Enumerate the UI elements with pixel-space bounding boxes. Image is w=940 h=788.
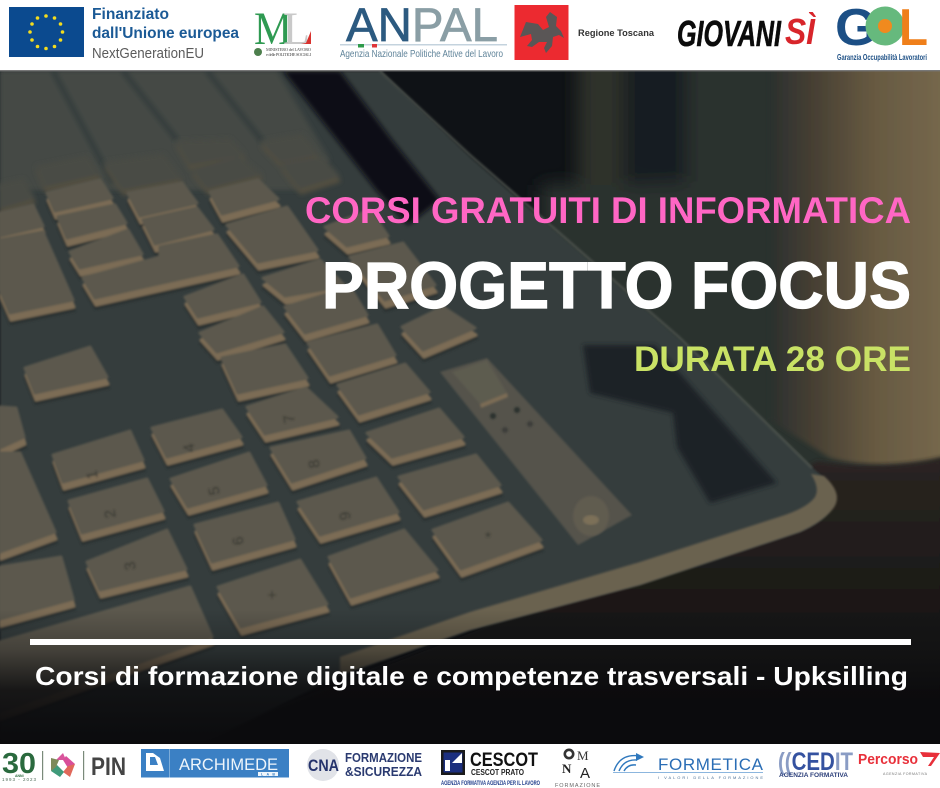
reflection in frame top (283, 71, 440, 225)
logo: Formetica: I VALORI DELLA FORMAZIONE (658, 775, 763, 780)
icon: pegasus (520, 12, 564, 53)
key legends (83, 413, 491, 604)
description text: Corsi di formazione digitale e competenze trasversali - Upksilling (35, 661, 908, 691)
logo: EU text: NextGenerationEU (92, 45, 204, 62)
logo: Cedit: ((CEDIT (778, 748, 853, 776)
divider line (30, 639, 911, 645)
logo: Ministero del Lavoro: L (283, 3, 310, 55)
logo: Cescot: CESCOT PRATO (471, 768, 524, 777)
faint upper keys (0, 135, 339, 213)
logo: Ministero del Lavoro (254, 3, 312, 57)
logo: Percorso: Percorso (858, 751, 918, 768)
logo: Regione Toscana (514, 5, 655, 60)
logo: Cescot: CESCOT (470, 750, 538, 771)
oval button (573, 496, 609, 536)
logo: Omna: M (577, 748, 589, 763)
keyboard body (0, 71, 834, 745)
EU stars (28, 14, 64, 50)
key legends: 6 (229, 535, 248, 546)
logo: 30 anni: 30 (2, 748, 36, 780)
logo: Percorso: AGENZIA FORMATIVA (883, 772, 928, 776)
reflection in frame right (583, 345, 777, 503)
key legends: 3 (121, 560, 140, 571)
logo: PIN star (51, 753, 75, 777)
title: progetto focus: PROGETTO FOCUS (322, 248, 911, 322)
logo: EU text: Finanziato (92, 6, 169, 23)
logo: GOL: L (899, 0, 928, 57)
logo: CNA: FORMAZIONE (345, 750, 422, 765)
logo: EU flag (9, 7, 84, 57)
logo: GOL: G (835, 0, 877, 57)
logo: EU text (92, 6, 239, 62)
button highlight (583, 515, 599, 525)
bottom logo bar (0, 744, 940, 788)
logo: Formetica: FORMETICA (658, 755, 764, 774)
keyboard front rim (340, 474, 837, 675)
logo: EU text: dall'Unione europea (92, 25, 239, 42)
logo: Regione Toscana: Regione Toscana (578, 28, 655, 39)
logo: Giovani Sì: SÌ (785, 11, 817, 52)
logo: GOL (835, 0, 928, 62)
logo: Omna: A (580, 765, 590, 782)
logo: Archimede: ARCHIMEDE (179, 755, 278, 774)
logo: Archimede: LAB (261, 773, 275, 777)
table (180, 457, 940, 745)
logo: Ministero del Lavoro: MINISTERO del LAVORO (266, 47, 311, 52)
logo: ANPAL: Agenzia Nazionale Politiche Attive del Lavoro (340, 49, 503, 60)
thin rim light along the upper edge (380, 71, 812, 468)
logo: PIN: PIN (91, 753, 126, 781)
logo: Percorso (858, 751, 940, 776)
logo: Omna: N (562, 761, 572, 776)
logo: 30 anni: 1993 - 2023 (2, 777, 36, 782)
logo: Giovani Sì: GIOVANI (677, 13, 782, 54)
logo: PIN (83, 751, 126, 781)
logo: Ministero del Lavoro: M (254, 3, 292, 55)
logo: CNA (307, 749, 423, 781)
key legends: 5 (205, 485, 224, 496)
logo: Omna (555, 748, 600, 788)
key legends: 4 (180, 442, 199, 453)
strip key and dots (452, 360, 533, 433)
key legends: 1 (83, 469, 102, 480)
logo: Ministero del Lavoro: e delle POLITICHE SOCIALI (266, 52, 312, 57)
key legends: 2 (101, 508, 120, 519)
key legends: 8 (305, 458, 324, 469)
key legends: + (268, 587, 277, 604)
mug (770, 50, 940, 465)
logo: CNA: CNA (308, 756, 339, 775)
logo: Archimede (141, 749, 289, 778)
logo: Cedit: AGENZIA FORMATIVA (779, 773, 849, 779)
logo: Cescot: AGENZIA FORMATIVA AGENZIA PER IL LAVORO (441, 781, 540, 787)
key legends: 7 (280, 413, 299, 424)
logo: 30 anni: ANNI (15, 774, 24, 778)
row gaps (53, 71, 263, 183)
right backdrop (540, 50, 940, 480)
key legends: * (485, 529, 491, 546)
lower darkening (0, 610, 940, 744)
button strip (440, 358, 632, 545)
keys (0, 180, 542, 722)
subheading: durata: DURATA 28 ORE (634, 340, 911, 379)
top logo bar (0, 0, 940, 71)
heading: corsi gratuiti: CORSI GRATUITI DI INFORMATICA (305, 190, 911, 231)
key legends: 9 (336, 510, 355, 521)
logo: Formetica (613, 753, 764, 780)
logo: CNA: &SICUREZZA (345, 764, 423, 779)
logo: Cescot (441, 750, 540, 787)
upper key rows (0, 71, 330, 190)
